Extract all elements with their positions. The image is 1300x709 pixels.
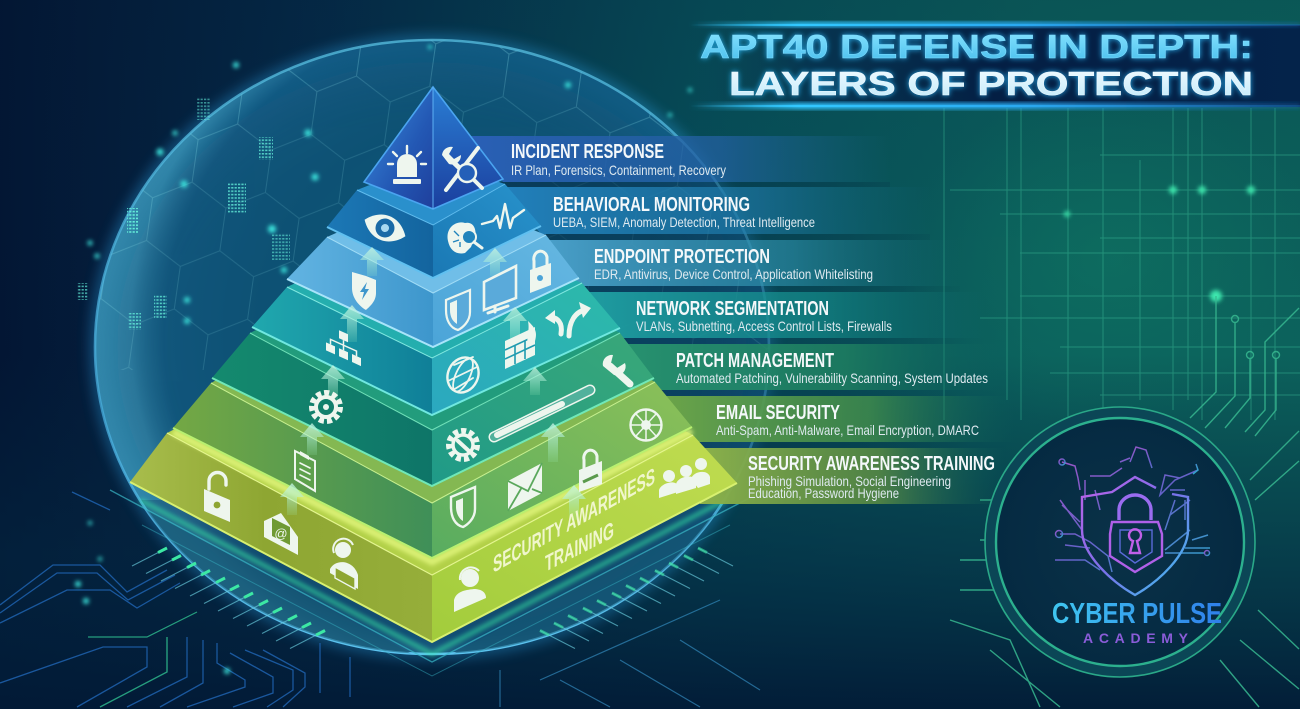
icon: shield with bolt xyxy=(352,272,376,310)
label: behavioral monitoring xyxy=(553,194,815,230)
icon: network hierarchy xyxy=(326,324,361,366)
label: incident response: IR Plan, Forensics, Containment, Recovery xyxy=(511,162,726,178)
icon: progress bar xyxy=(494,390,590,437)
label: network segmentation: NETWORK SEGMENTATION xyxy=(636,298,829,320)
icon: agent bust xyxy=(454,567,486,612)
data blocks and particles xyxy=(75,45,692,674)
layer 2: behavioral monitoring xyxy=(327,160,541,278)
icon: half shield xyxy=(446,290,470,330)
layer 1: incident response apex xyxy=(364,87,503,209)
logo padlock xyxy=(1110,495,1162,572)
bar gaps xyxy=(500,182,995,448)
label: incident response xyxy=(511,141,726,178)
icon: open lock xyxy=(204,472,230,522)
label: email security: Anti-Spam, Anti-Malware, Email Encryption, DMARC xyxy=(716,422,979,438)
bar: security awareness training xyxy=(690,448,1005,504)
layer 3: endpoint protection xyxy=(287,190,579,347)
layer 5: patch management xyxy=(212,240,654,486)
up arrows xyxy=(280,247,586,520)
icon: turn arrows xyxy=(545,302,591,336)
label: incident response: INCIDENT RESPONSE xyxy=(511,141,664,163)
label: endpoint protection xyxy=(594,246,873,282)
label: security awareness training xyxy=(748,453,995,501)
icon: wrench gear xyxy=(449,431,477,459)
circuit traces: right xyxy=(950,296,1299,707)
training label on base layer: SECURITY AWARENESS xyxy=(493,464,655,579)
icon: brain with magnifier xyxy=(448,222,482,254)
title banner xyxy=(690,22,1300,109)
bar: behavioral monitoring xyxy=(500,187,930,234)
layer 7: security awareness training xyxy=(130,300,737,642)
icon: encrypted padlock xyxy=(579,450,602,492)
comb traces xyxy=(132,548,733,648)
logo shield xyxy=(1082,477,1188,595)
grid lines: upper right xyxy=(944,108,1300,420)
label: security awareness training: Education, Password Hygiene xyxy=(748,485,899,501)
label: patch management: Automated Patching, Vulnerability Scanning, System Updates xyxy=(676,370,988,386)
bar: incident response xyxy=(470,136,890,182)
label: behavioral monitoring: UEBA, SIEM, Anomaly Detection, Threat Intelligence xyxy=(553,214,815,230)
logo circuit traces xyxy=(1055,447,1210,572)
title line 2: LAYERS OF PROTECTION xyxy=(729,65,1253,102)
icon: malware wheel xyxy=(630,410,662,440)
bar: patch management xyxy=(620,344,1000,390)
icon: eye xyxy=(360,208,410,248)
logo subtitle: ACADEMY xyxy=(1083,630,1189,646)
icon: clipboard xyxy=(295,451,315,491)
logo badge: cyber pulse academy xyxy=(985,407,1255,677)
icon: globe xyxy=(442,352,484,398)
training label on base layer: TRAINING xyxy=(545,517,614,578)
icon: envelope xyxy=(508,463,542,511)
icon: shield email layer xyxy=(451,487,475,527)
label: email security: EMAIL SECURITY xyxy=(716,402,840,424)
layer 6: email security xyxy=(173,260,692,562)
label: email security xyxy=(716,402,979,438)
title line 1: APT40 DEFENSE IN DEPTH: xyxy=(700,28,1253,65)
grid nodes xyxy=(1064,186,1255,302)
icon: tools and magnifier xyxy=(442,147,482,190)
icon: gear xyxy=(312,393,340,421)
label: security awareness training: SECURITY AWARENESS TRAINING xyxy=(748,453,995,475)
bottom-left traces xyxy=(0,492,350,707)
icon: at mail xyxy=(264,513,298,555)
text labels xyxy=(511,141,995,501)
icon: at mail: @ xyxy=(274,526,288,541)
training label on base layer xyxy=(493,464,655,579)
icon: firewall brick xyxy=(505,321,536,369)
label: patch management xyxy=(676,350,988,386)
icon: people group xyxy=(659,458,710,498)
label: network segmentation xyxy=(636,298,892,334)
bar: email security xyxy=(655,396,1015,442)
label: network segmentation: VLANs, Subnetting, Access Control Lists, Firewalls xyxy=(636,318,892,334)
sphere: shield dome xyxy=(89,34,780,660)
label: endpoint protection: ENDPOINT PROTECTION xyxy=(594,246,770,268)
icon: monitor xyxy=(484,266,516,313)
label: endpoint protection: EDR, Antivirus, Device Control, Application Whitelisting xyxy=(594,266,873,282)
label: security awareness training: Phishing Simulation, Social Engineering xyxy=(748,473,951,489)
layer 4: network segmentation xyxy=(252,220,620,415)
bar: network segmentation xyxy=(582,292,985,338)
pyramid xyxy=(130,87,737,642)
logo wordmark: CYBER PULSE xyxy=(1052,598,1222,630)
label: behavioral monitoring: BEHAVIORAL MONITORING xyxy=(553,194,750,216)
label: patch management: PATCH MANAGEMENT xyxy=(676,350,834,372)
icon: padlock xyxy=(530,251,551,293)
icon: wrench xyxy=(603,355,630,384)
label bars xyxy=(470,136,1015,504)
icon: alarm beacon xyxy=(388,146,426,184)
icon: support agent with laptop xyxy=(330,539,358,589)
circuit base under pyramid xyxy=(0,490,770,707)
icon: pulse line xyxy=(482,204,524,228)
bar: endpoint protection xyxy=(545,240,960,286)
